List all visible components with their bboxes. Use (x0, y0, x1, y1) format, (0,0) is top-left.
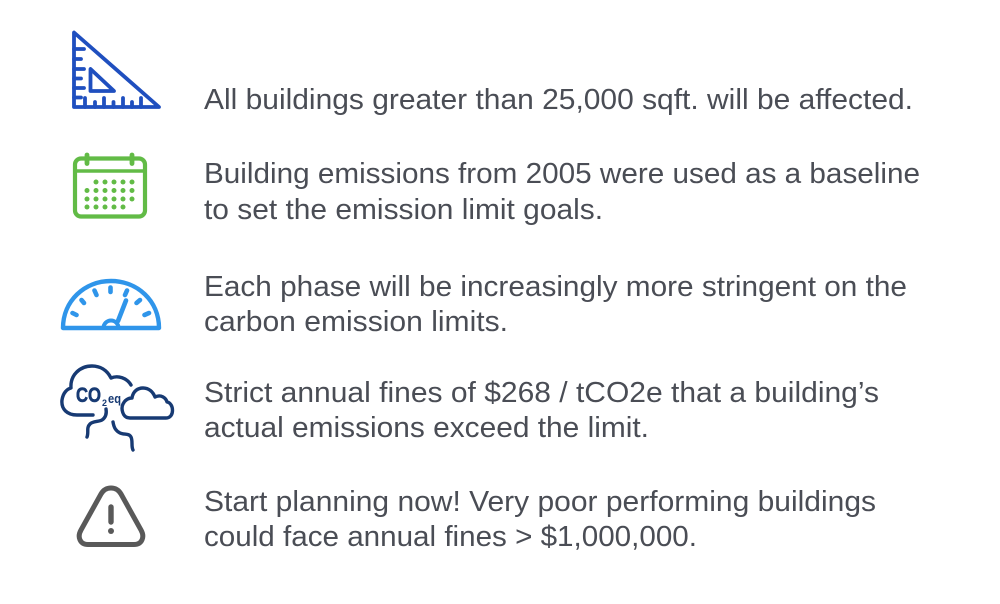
label: CO2eq: CO (76, 384, 101, 407)
text: phases (204, 271, 907, 338)
text: start planning: could face annual fines > $1,000,000. (204, 521, 697, 553)
icon: set square ruler (74, 32, 159, 107)
text: start planning (204, 486, 876, 553)
icon: speedometer gauge (63, 281, 159, 328)
icon: warning triangle (79, 488, 143, 544)
icon: CO2eq clouds (62, 366, 172, 450)
text: baseline: Building emissions from 2005 were used as a baseline (204, 158, 920, 190)
icon: calendar (75, 155, 145, 216)
text: fines: Strict annual fines of $268 / tCO2e that a building’s (204, 377, 879, 409)
icon: CO2eq clouds: eq (108, 391, 121, 406)
text: phases: carbon emission limits. (204, 306, 508, 338)
text: affected buildings: All buildings greater than 25,000 sqft. will be affected. (204, 84, 913, 116)
text: start planning: Start planning now! Very poor performing buildings (204, 486, 876, 518)
text: fines (204, 377, 879, 444)
icon: CO2eq clouds: 2 (102, 398, 107, 408)
text: baseline (204, 158, 920, 226)
text: baseline: to set the emission limit goals. (204, 194, 603, 226)
text: fines: actual emissions exceed the limit. (204, 412, 649, 444)
text: phases: Each phase will be increasingly more stringent on the (204, 271, 907, 303)
